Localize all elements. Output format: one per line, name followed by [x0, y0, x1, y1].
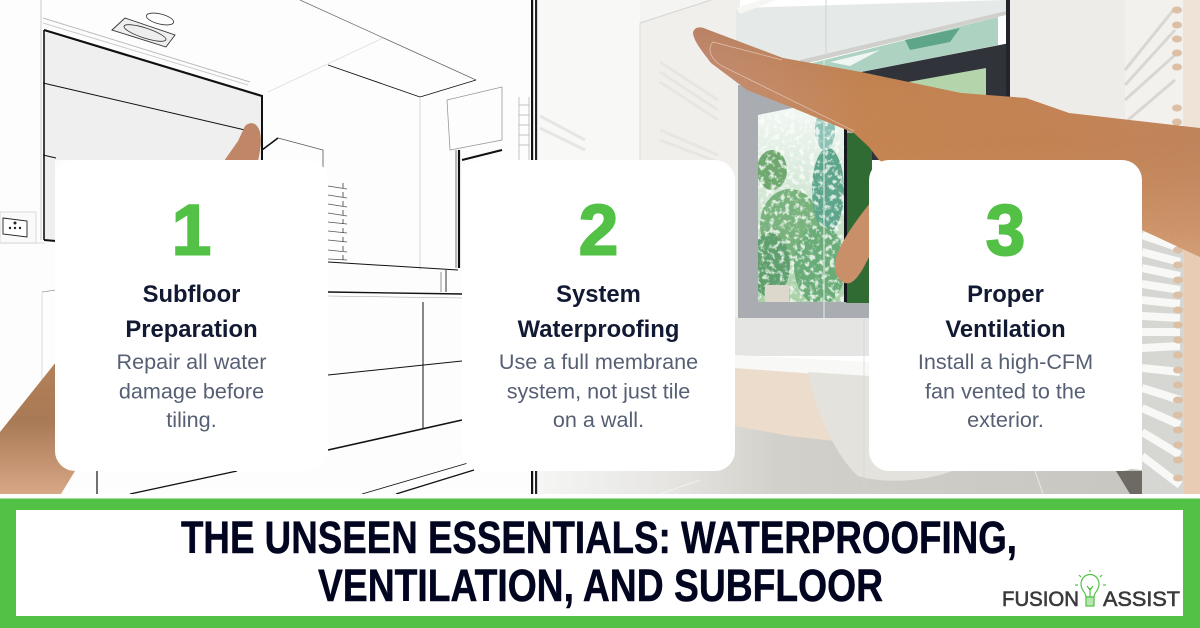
- number 2: 2: [579, 192, 618, 270]
- body text: Install a high-CFM: [918, 349, 1093, 374]
- panel: card 3 proper ventilation: [869, 160, 1142, 471]
- title: VENTILATION, AND SUBFLOOR: [318, 560, 883, 611]
- icon: wall socket: [0, 212, 36, 243]
- background: photo half of bathroom: [534, 0, 1200, 494]
- panel: card 1 subfloor preparation: [55, 160, 328, 471]
- body text: Use a full membrane: [499, 349, 698, 374]
- radiator: [1125, 0, 1200, 494]
- body text: exterior.: [967, 407, 1044, 432]
- sketch radiator: [328, 183, 347, 263]
- heading: Preparation: [125, 316, 258, 343]
- number 3: 3: [986, 192, 1025, 270]
- title: THE UNSEEN ESSENTIALS: WATERPROOFING,: [181, 512, 1017, 563]
- body text: damage before: [119, 378, 264, 404]
- window: [736, 0, 1010, 318]
- icon: light bulb: [1075, 570, 1106, 606]
- logo: Fusion Assist: FUSION: [1002, 588, 1079, 611]
- body text: tiling.: [166, 407, 217, 432]
- body text: system, not just tile: [507, 378, 690, 404]
- title banner: [0, 494, 1200, 628]
- background: sketch half of bathroom: [0, 0, 534, 494]
- body text: Repair all water: [116, 349, 267, 374]
- hand: right arm: [693, 25, 1200, 283]
- body text: fan vented to the: [925, 378, 1086, 404]
- thumb: [835, 203, 870, 283]
- hand: left arm and fingertip: [0, 123, 261, 494]
- vanity and bath: [536, 318, 1165, 494]
- heading: System: [556, 281, 641, 308]
- body text: on a wall.: [553, 407, 644, 432]
- logo: Fusion Assist: ASSIST: [1103, 588, 1180, 611]
- panel: card 2 system waterproofing: [462, 160, 735, 471]
- heading: Waterproofing: [518, 316, 679, 343]
- number 1: 1: [172, 192, 211, 270]
- heading: Ventilation: [945, 316, 1066, 343]
- heading: Subfloor: [143, 281, 240, 308]
- faint towel radiators: [540, 62, 718, 162]
- icon: ceiling vent: [112, 11, 175, 47]
- heading: Proper: [967, 281, 1044, 308]
- divider line between sketch and photo: [531, 0, 538, 494]
- logo: Fusion Assist: [1002, 570, 1180, 611]
